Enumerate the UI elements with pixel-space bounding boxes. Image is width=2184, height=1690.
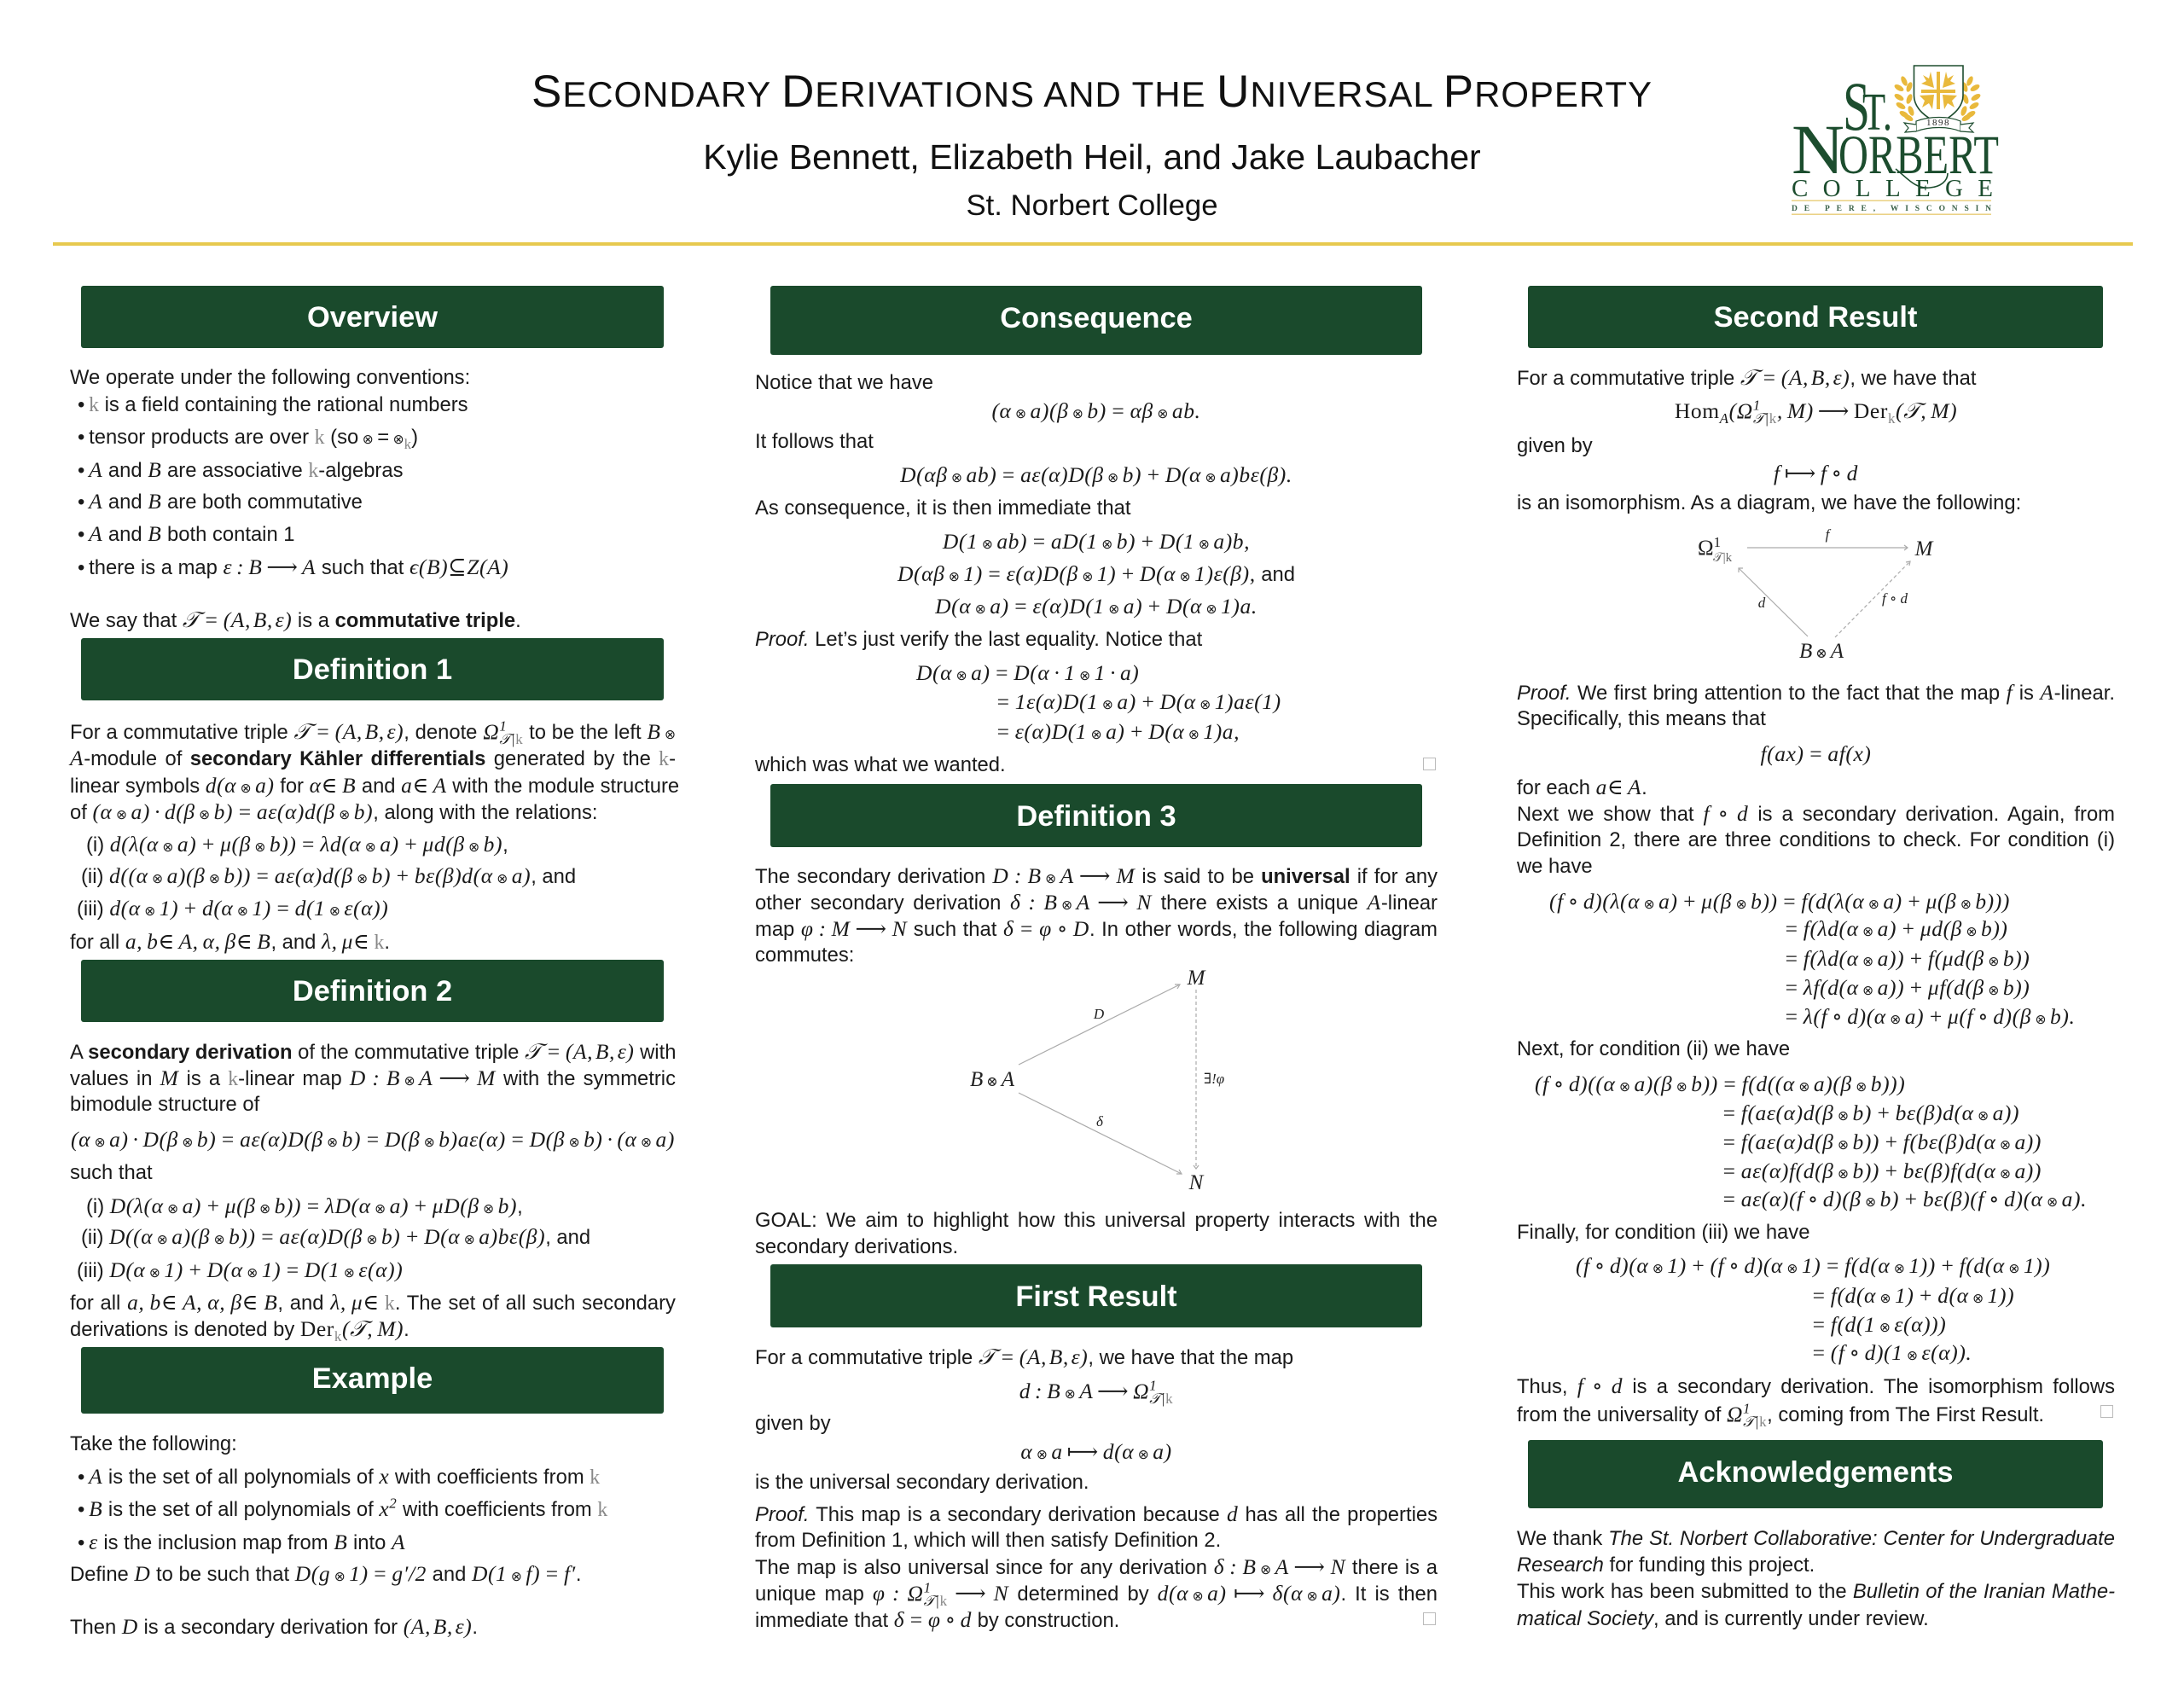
text block: example: Define D to be such that D(g ⊗1) = g′/2 and D(1 ⊗f) = f′.: [70, 1561, 581, 1585]
diagram labels: f: [1826, 526, 1832, 543]
text block: definition 2: (α ⊗a) · D(β ⊗b) = aε(α)D(β ⊗b) = D(β ⊗b)aε(α) = D(β ⊗b) · (α ⊗a): [71, 1126, 675, 1152]
text block: consequence: = ε(α)D(1 ⊗a) + D(α ⊗1)a,: [996, 718, 1240, 744]
text block: conventions: • there is a map ε : B ⟶ A such that ϵ(B)⊆Z(A): [78, 555, 508, 578]
text block: consequence: As consequence, it is then immediate that: [755, 497, 1131, 519]
text block: second result: we have: [1517, 855, 1593, 877]
arrow: delta: [1019, 1093, 1182, 1174]
text block: definition 2: bimodule structure of: [70, 1092, 259, 1116]
text block: second result: = f(λd(α ⊗a) + μd(β ⊗b)): [1784, 916, 2008, 940]
text block: second result: Finally, for condition (iii) we have: [1517, 1220, 1809, 1244]
text block: first result: [755, 1344, 1438, 1631]
text block: consequence: D(αβ ⊗ab) = aε(α)D(β ⊗b) + D(α ⊗a)bε(β).: [900, 462, 1292, 486]
text block: conventions: • k is a field containing the rational numbers: [78, 392, 468, 416]
logo wordmark: COLLEGE: [1792, 175, 1993, 202]
institution: St. Norbert College: [966, 189, 1217, 222]
diagram labels: M: [1914, 537, 1934, 560]
text block: definition 3: other secondary derivation δ : B ⊗A ⟶ N there exists a unique A-linear: [755, 889, 1438, 915]
text block: definition 2: (iii) D(α ⊗1) + D(α ⊗1) = D(1 ⊗ε(α)): [77, 1257, 403, 1281]
text block: second result: = f(aε(α)d(β ⊗b)) + f(bε(β)d(α ⊗a)): [1722, 1130, 2042, 1153]
text block: second result: Next, for condition (ii) we have: [1517, 1037, 1790, 1060]
panel: Definition 3: [755, 784, 1438, 1257]
logo: St. Norbert College crest: [1792, 65, 1999, 215]
diagram: isomorphism triangle: [1698, 526, 1934, 663]
text block: conventions: • A and B are associative k-algebras: [78, 457, 403, 481]
text block: acknowledgements: We thank The St. Norbert Collaborative: Center for Undergraduate: [1517, 1527, 2115, 1549]
heading: Definition 2: Definition 2: [293, 975, 452, 1008]
heading: Second Result: Second Result: [1714, 301, 1917, 334]
arrow: D: [1019, 984, 1180, 1065]
heading: Consequence: Consequence: [1000, 302, 1193, 334]
logo wordmark: N: [1792, 110, 1844, 189]
heading: Acknowledgements: Acknowledgements: [1678, 1456, 1953, 1489]
diagram labels: f ∘ d: [1882, 590, 1908, 607]
text block: first result: given by: [755, 1411, 831, 1435]
heading: Overview: [81, 286, 664, 348]
text block: conventions: • A and B both contain 1: [78, 520, 295, 546]
arrow: d: [1739, 568, 1808, 636]
diagram labels: Ω: [1698, 537, 1714, 560]
panel: First Result: [755, 1264, 1438, 1631]
icon: QED box: [1423, 1612, 1436, 1625]
text block: definition 2: for all a, b∈ A, α, β∈ B, and λ, μ∈ k. The set of all such secondary: [70, 1290, 676, 1314]
text block: second result: = f(d(1 ⊗ε(α))): [1811, 1312, 1946, 1336]
logo wordmark: ORBERT: [1838, 125, 1999, 186]
text block: first result: immediate that δ = φ ∘ d by construction.: [755, 1607, 1119, 1631]
text block: second result: Thus, f ∘ d is a secondary derivation. The isomorphism follows: [1517, 1373, 2115, 1397]
diagram labels: D: [1093, 1006, 1105, 1022]
text block: first result: from Definition 1, which will then satisfy Definition 2.: [755, 1529, 1221, 1551]
text block: conventions: [70, 365, 521, 631]
text block: second result: = λf(d(α ⊗a)) + μf(d(β ⊗b)): [1784, 974, 2030, 1000]
text block: second result: Specifically, this means that: [1517, 706, 1766, 730]
text block: first result: α ⊗a ⟼ d(α ⊗a): [1020, 1438, 1172, 1464]
icon: shield: [1914, 66, 1963, 124]
text block: consequence: D(αβ ⊗1) = ε(α)D(β ⊗1) + D(α ⊗1)ε(β), and: [897, 561, 1295, 585]
arrow: f: [1747, 545, 1908, 550]
icon: ribbon 1898: [1904, 118, 1973, 132]
text block: definition 1: (iii) d(α ⊗1) + d(α ⊗1) = d(1 ⊗ε(α)): [77, 896, 388, 920]
text block: consequence: Notice that we have: [755, 370, 933, 394]
arrow: exists unique phi: [1194, 990, 1199, 1169]
icon: cross and rays: [1920, 72, 1957, 109]
text block: definition 2: values in M is a k-linear map D : B ⊗A ⟶ M with the symmetric: [70, 1065, 676, 1090]
text block: conventions: We operate under the following conventions:: [70, 365, 470, 389]
logo wordmark: DE PERE, WISCONSIN: [1792, 205, 1991, 213]
title: SECONDARY DERIVATIONS AND THE UNIVERSAL PROPERTY: [531, 67, 1653, 117]
heading: First Result: First Result: [1015, 1281, 1177, 1313]
icon: QED box: [1423, 758, 1436, 770]
heading: Definition 1: [81, 638, 664, 700]
text block: second result: = λ(f ∘ d)(α ⊗a) + μ(f ∘ d)(β ⊗b).: [1784, 1003, 2075, 1029]
heading: Definition 1: Definition 1: [293, 653, 452, 686]
heading: Example: [81, 1347, 664, 1414]
text block: acknowledgements: Research for funding this project.: [1517, 1553, 1815, 1577]
text block: first result: d : B ⊗A ⟶ Ω1𝒯|k: [1019, 1377, 1173, 1407]
panel: Definition 1: [68, 638, 679, 954]
text block: example: Then D is a secondary derivation for (A, B, ε).: [70, 1614, 478, 1638]
text block: definition 1: [68, 717, 679, 954]
text block: second result: from the universality of Ω1𝒯|k, coming from The First Result.: [1517, 1400, 2044, 1430]
heading: Example: Example: [312, 1362, 433, 1395]
text block: second result: = (f ∘ d)(1 ⊗ε(α)).: [1811, 1339, 1972, 1365]
text block: example: [70, 1432, 607, 1638]
heading: Definition 3: Definition 3: [1016, 800, 1176, 833]
panel: Example: [70, 1347, 664, 1638]
diagram labels: 𝒯|k: [1713, 551, 1733, 565]
heading: Definition 2: [81, 960, 664, 1022]
text block: first result: is the universal secondary derivation.: [755, 1471, 1089, 1493]
text block: example: • B is the set of all polynomials of x2 with coefficients from k: [78, 1495, 607, 1520]
text block: second result: for each a∈ A.: [1517, 775, 1647, 799]
icon: laurel: [1893, 75, 1982, 123]
text block: definition 3: GOAL: We aim to highlight how this universal property interacts with the: [755, 1208, 1438, 1232]
text block: consequence: D(1 ⊗ab) = aD(1 ⊗b) + D(1 ⊗a)b,: [943, 529, 1250, 553]
diagram labels: 1: [1714, 534, 1721, 550]
text block: definition 2: derivations is denoted by Derk(𝒯, M).: [70, 1315, 410, 1344]
text block: consequence: [755, 370, 1789, 776]
heading: Definition 3: [770, 784, 1422, 847]
text block: second result: HomA(Ω1𝒯|k, M) ⟶ Derk(𝒯, M): [1675, 397, 1957, 427]
text block: conventions: We say that 𝒯 = (A, B, ε) is a commutative triple.: [70, 607, 521, 631]
text block: definition 1: for all a, b∈ A, α, β∈ B, and λ, μ∈ k.: [70, 928, 390, 954]
panel: Overview: [70, 286, 664, 631]
text block: consequence: It follows that: [755, 430, 874, 452]
text block: definition 3: map φ : M ⟶ N such that δ = φ ∘ D. In other words, the following diagram: [755, 916, 1438, 940]
header rule: [53, 242, 2133, 246]
text block: first result: unique map φ : Ω1𝒯|k ⟶ N determined by d(α ⊗a) ⟼ δ(α ⊗a). It is then: [755, 1579, 1438, 1609]
text block: definition 3: The secondary derivation D : B ⊗A ⟶ M is said to be universal if for any: [755, 863, 1438, 887]
text block: definition 3: [755, 863, 1438, 1257]
text block: second result: f(ax) = af(x): [1760, 740, 1872, 766]
diagram labels: δ: [1096, 1113, 1104, 1130]
heading: Acknowledgements: [1528, 1440, 2103, 1508]
heading: Overview: Overview: [307, 301, 438, 334]
diagram: universal property triangle: [970, 967, 1224, 1194]
text block: second result: = aε(α)(f ∘ d)(β ⊗b) + bε(β)(f ∘ d)(α ⊗a).: [1722, 1186, 2087, 1211]
diagram labels: M: [1187, 967, 1206, 990]
text block: definition 1: linear symbols d(α ⊗a) for α∈ B and a∈ A with the module structure: [70, 773, 679, 797]
text block: definition 1: For a commutative triple 𝒯 = (A, B, ε), denote Ω1𝒯|k to be the left B ⊗: [70, 717, 676, 747]
text block: definition 1: of (α ⊗a) · d(β ⊗b) = aε(α)d(β ⊗b), along with the relations:: [70, 799, 597, 824]
text block: first result: The map is also universal since for any derivation δ : B ⊗A ⟶ N there is a: [755, 1554, 1438, 1578]
heading: First Result: [770, 1264, 1422, 1327]
text block: second result: Next we show that f ∘ d is a secondary derivation. Again, from: [1517, 800, 2115, 826]
diagram labels: d: [1758, 595, 1766, 611]
text block: second result: = f(λd(α ⊗a)) + f(μd(β ⊗b)): [1784, 945, 2030, 971]
text block: example: Take the following:: [70, 1432, 237, 1455]
text block: acknowledgements: This work has been submitted to the Bulletin of the Iranian Mathe-: [1517, 1580, 2115, 1602]
diagram labels: [1698, 526, 1934, 663]
text block: definition 1: (ii) d((α ⊗a)(β ⊗b)) = aε(α)d(β ⊗b) + bε(β)d(α ⊗a), and: [81, 863, 576, 887]
icon: ribbon 1898: 1898: [1926, 118, 1950, 128]
text block: second result: f ⟼ f ∘ d: [1774, 461, 1858, 485]
text block: definition 3: secondary derivations.: [755, 1235, 958, 1257]
panel: Consequence: [755, 286, 1789, 776]
logo wordmark: [1792, 67, 1999, 215]
text block: second result: = f(d(α ⊗1) + d(α ⊗1)): [1811, 1283, 2014, 1307]
text block: consequence: D(α ⊗a) = ε(α)D(1 ⊗a) + D(α ⊗1)a.: [935, 594, 1258, 618]
text block: definition 2: [70, 1039, 676, 1344]
text block: second result: Proof. We first bring attention to the fact that the map f is A-linear.: [1517, 679, 2115, 705]
text block: consequence: Proof. Let’s just verify the last equality. Notice that: [755, 628, 1202, 650]
diagram labels: B ⊗ A: [1799, 640, 1844, 663]
diagram labels: N: [1188, 1171, 1205, 1194]
text block: second result: given by: [1517, 433, 1593, 457]
panel: Acknowledgements: [1517, 1440, 2115, 1629]
text block: second result: [1517, 365, 2115, 1430]
text block: consequence: which was what we wanted.: [755, 752, 1006, 776]
text block: definition 2: such that: [70, 1160, 153, 1184]
logo wordmark: S: [1843, 67, 1870, 145]
text block: definition 3: commutes:: [755, 944, 854, 966]
text block: conventions: • A and B are both commutative: [78, 488, 363, 514]
text block: definition 2: (i) D(λ(α ⊗a) + μ(β ⊗b)) = λD(α ⊗a) + μD(β ⊗b),: [86, 1193, 523, 1218]
heading: Consequence: [770, 286, 1422, 355]
arrow: f compose d: [1835, 561, 1910, 637]
diagram labels: B ⊗ A: [970, 1068, 1015, 1091]
text block: definition 2: A secondary derivation of the commutative triple 𝒯 = (A, B, ε) with: [70, 1039, 676, 1063]
text block: acknowledgements: matical Society, and is currently under review.: [1517, 1607, 1929, 1629]
diagram labels: [970, 967, 1224, 1194]
text block: consequence: D(α ⊗a) = D(α · 1 ⊗1 · a): [916, 660, 1139, 684]
text block: second result: = f(aε(α)d(β ⊗b) + bε(β)d(α ⊗a)): [1722, 1101, 2019, 1124]
panel: Second Result: [1517, 286, 2115, 1430]
text block: second result: = aε(α)f(d(β ⊗b)) + bε(β)f(d(α ⊗a)): [1722, 1159, 2042, 1182]
text block: second result: (f ∘ d)(α ⊗1) + (f ∘ d)(α ⊗1) = f(d(α ⊗1)) + f(d(α ⊗1)): [1576, 1252, 2050, 1278]
text block: second result: is an isomorphism. As a diagram, we have the following:: [1517, 491, 2021, 514]
text block: definition 1: A-module of secondary Kähler differentials generated by the k-: [70, 746, 676, 770]
text block: consequence: = 1ε(α)D(1 ⊗a) + D(α ⊗1)aε(1): [996, 689, 1281, 713]
text block: first result: For a commutative triple 𝒯 = (A, B, ε), we have that the map: [755, 1344, 1293, 1368]
text block: second result: (f ∘ d)((α ⊗a)(β ⊗b)) = f(d((α ⊗a)(β ⊗b))): [1535, 1071, 1905, 1095]
text block: conventions: • tensor products are over k (so ⊗= ⊗k): [78, 425, 418, 451]
icon: QED box: [2100, 1405, 2113, 1418]
text block: first result: Proof. This map is a secondary derivation because d has all the properties: [755, 1501, 1438, 1525]
text block: consequence: (α ⊗a)(β ⊗b) = αβ ⊗ab.: [991, 398, 1201, 423]
heading: Second Result: [1528, 286, 2103, 348]
authors: Kylie Bennett, Elizabeth Heil, and Jake Laubacher: [703, 137, 1481, 177]
text block: example: • A is the set of all polynomials of x with coefficients from k: [78, 1464, 600, 1488]
logo wordmark: T.: [1862, 84, 1892, 142]
panel: Definition 2: [70, 960, 676, 1344]
text block: second result: For a commutative triple 𝒯 = (A, B, ε), we have that: [1517, 365, 1977, 389]
text block: acknowledgements: [1517, 1527, 2115, 1629]
text block: second result: (f ∘ d)(λ(α ⊗a) + μ(β ⊗b)) = f(d(λ(α ⊗a) + μ(β ⊗b))): [1549, 889, 2010, 913]
text block: second result: Definition 2, there are three conditions to check. For condition (i): [1517, 828, 2115, 851]
text block: example: • ε is the inclusion map from B into A: [78, 1529, 405, 1554]
text block: definition 1: (i) d(λ(α ⊗a) + μ(β ⊗b)) = λd(α ⊗a) + μd(β ⊗b),: [86, 831, 508, 857]
text block: definition 2: (ii) D((α ⊗a)(β ⊗b)) = aε(α)D(β ⊗b) + D(α ⊗a)bε(β), and: [81, 1223, 590, 1249]
diagram labels: ∃!φ: [1204, 1071, 1224, 1087]
